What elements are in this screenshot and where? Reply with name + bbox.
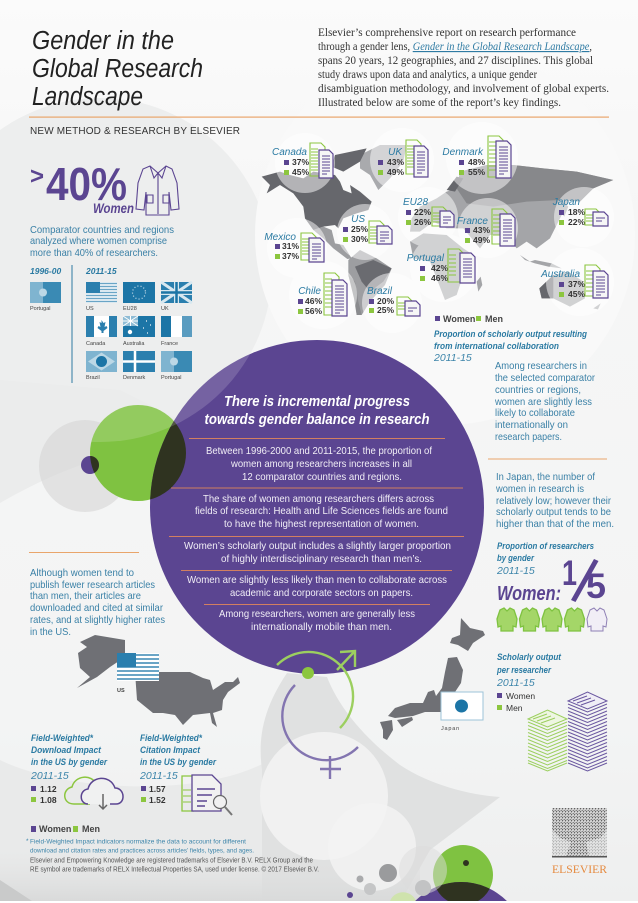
- flag: Portugal 1996: [30, 282, 61, 312]
- footnote: *: [26, 838, 29, 845]
- Elsevier logo: [552, 808, 607, 876]
- right text: Japan: relatively low; however their: [496, 495, 611, 507]
- finding 2: [195, 493, 448, 530]
- download impact block: [30, 733, 108, 805]
- finding 5: [219, 608, 415, 633]
- country: Denmark: Denmark: [442, 147, 484, 158]
- icon: cloud download: [65, 777, 123, 809]
- country: Brazil: 20%: [377, 296, 394, 306]
- finding 1: 12 comparator countries and regions.: [242, 471, 402, 483]
- country: Australia: Australia: [540, 269, 580, 280]
- right text: Japan: [495, 471, 614, 530]
- flag: UK: UK: [161, 306, 169, 312]
- right text: collaboration: internationally on: [495, 419, 568, 431]
- comparator text: more than 40% of researchers.: [30, 247, 158, 259]
- country: Chile: [298, 273, 347, 316]
- intro paragraph: Illustrated below are some of the report’s key findings.: [318, 97, 561, 109]
- country: Portugal: [407, 249, 475, 283]
- title: Global Research: [32, 55, 203, 83]
- flag: Portugal: Portugal: [161, 375, 182, 381]
- intro paragraph: spans 20 years, 12 geographies, and 27 disciplines. This global: [318, 55, 593, 67]
- trademark text: RE symbol are trademarks of RELX Intellectual Properties SA, used under license. © 2017 Elsevier B.V.: [30, 866, 319, 874]
- country: Australia: 37%: [568, 279, 585, 289]
- country: Canada: 45%: [292, 167, 309, 177]
- icon: lab coat: [136, 166, 179, 215]
- country: Canada: 37%: [292, 157, 309, 167]
- right text: Japan: women in research is: [495, 483, 584, 495]
- trademark text: [30, 858, 319, 874]
- country: Denmark: 55%: [468, 167, 485, 177]
- flag period headings: 1996-00: [30, 266, 61, 276]
- country: UK: 43%: [387, 157, 404, 167]
- country: UK: UK: [388, 147, 403, 158]
- proportion heading: by gender: [497, 553, 535, 564]
- flag: EU28: EU28: [123, 306, 137, 312]
- country: Chile: 46%: [305, 296, 322, 306]
- country: UK: 49%: [387, 167, 404, 177]
- country: Canada: [272, 143, 333, 178]
- scholarly output heading: [496, 652, 562, 689]
- finding 5: Among researchers, women are generally less: [219, 608, 415, 620]
- finding 3: [184, 540, 451, 565]
- US map: [77, 635, 240, 727]
- footnote: Field-Weighted Impact indicators normalize the data to account for different: [30, 838, 246, 846]
- country: Brazil: 25%: [377, 305, 394, 315]
- flag: Denmark: Denmark: [123, 375, 146, 381]
- Elsevier logo: ELSEVIER: [552, 864, 607, 876]
- right text: collaboration: women are slightly less: [494, 396, 592, 408]
- citation impact block: 2011-15: [139, 770, 178, 782]
- flag: Canada: Canada: [86, 341, 106, 347]
- country: Japan: Japan: [552, 197, 580, 208]
- country: EU28: 26%: [414, 217, 431, 227]
- right text: Japan: In Japan, the number of: [496, 471, 595, 483]
- download impact block: in the US by gender: [31, 757, 108, 768]
- country: US: US: [351, 214, 365, 225]
- bottom legend: Men: [82, 824, 100, 834]
- finding 3: of highly interdisciplinary research than men’s.: [221, 553, 422, 565]
- flag: Japan: Japan: [441, 726, 460, 732]
- flag: Brazil: Brazil: [86, 375, 100, 381]
- country: EU28: 22%: [414, 207, 431, 217]
- flag: Denmark: [123, 351, 155, 381]
- stat: more than 40% women: >: [30, 163, 44, 190]
- country: Japan: [552, 197, 608, 227]
- world map: [262, 145, 613, 315]
- left text: downloads: rates, and at slightly higher rates: [30, 614, 165, 626]
- map heading: Proportion of scholarly output resulting: [434, 329, 587, 340]
- stat: more than 40% women: 40%: [46, 158, 127, 210]
- map legend: Men: [485, 314, 503, 324]
- country: Japan: 22%: [568, 217, 585, 227]
- country: Chile: 56%: [305, 306, 322, 316]
- comparator text: [30, 224, 174, 259]
- map legend: Women: [443, 314, 475, 324]
- citation impact block: 1.52: [149, 795, 166, 805]
- flag: France: [161, 316, 192, 347]
- country: EU28: [403, 197, 454, 227]
- finding 4: Women are slightly less likely than men to collaborate across: [187, 574, 447, 586]
- flag: France: France: [161, 341, 178, 347]
- map heading: from international collaboration: [434, 341, 559, 352]
- citation impact block: [139, 733, 217, 805]
- right text: collaboration: likely to collaborate: [495, 407, 575, 419]
- flag period headings: 2011-15: [85, 266, 117, 276]
- map legend: [435, 314, 503, 324]
- finding 4: [187, 574, 447, 599]
- purple circle heading: There is incremental progress: [224, 393, 410, 410]
- right text: collaboration: the selected comparator: [495, 372, 595, 384]
- purple circle heading: towards gender balance in research: [204, 411, 430, 428]
- country: Portugal: 42%: [431, 263, 448, 273]
- left text: downloads: in the US.: [30, 626, 71, 638]
- citation impact block: 1.57: [149, 784, 166, 794]
- stack: women: [568, 692, 607, 771]
- flag: Brazil: [86, 351, 117, 381]
- country: Mexico: Mexico: [264, 232, 296, 243]
- output legend: Men: [506, 703, 523, 713]
- bottom legend: Women: [39, 824, 71, 834]
- country: France: 49%: [473, 235, 490, 245]
- flag: Canada: [86, 316, 117, 347]
- proportion heading: [496, 541, 594, 577]
- country: Brazil: [367, 286, 420, 316]
- download impact block: Field-Weighted*: [31, 733, 94, 744]
- proportion heading: Proportion of researchers: [497, 541, 594, 552]
- country: Mexico: 37%: [282, 251, 299, 261]
- comparator text: Comparator countries and regions: [30, 224, 174, 236]
- country: Chile: Chile: [298, 286, 321, 297]
- download impact block: Download Impact: [31, 745, 102, 756]
- download impact block: 2011-15: [30, 770, 69, 782]
- country: France: [457, 209, 515, 246]
- country: US: 30%: [351, 234, 368, 244]
- country: Australia: 45%: [568, 289, 585, 299]
- flag: Portugal: [161, 351, 192, 381]
- finding 2: The share of women among researchers differs across: [203, 493, 434, 505]
- flag: Japan: [441, 692, 483, 732]
- country: Mexico: [264, 232, 324, 262]
- map heading: 2011-15: [433, 352, 472, 364]
- flag: EU28: [123, 282, 155, 312]
- Japan map: [380, 618, 485, 740]
- footnote: download and citation rates and practices across articles’ fields, types, and ages.: [30, 848, 254, 854]
- country: Portugal: 46%: [431, 273, 448, 283]
- icon: document with magnifier: [182, 775, 232, 815]
- intro paragraph: disambiguation methodology, and involvement of global experts.: [318, 83, 609, 95]
- stack: men: [528, 710, 567, 771]
- intro paragraph: through a gender lens, Gender in the Global Research Landscape,: [318, 41, 592, 53]
- trademark text: Elsevier and Empowering Knowledge are registered trademarks of Elsevier B.V. RELX Group and the: [30, 858, 313, 864]
- country: France: 43%: [473, 225, 490, 235]
- right text: Japan: higher than that of the men.: [496, 518, 614, 530]
- flag: UK: [161, 282, 192, 312]
- country: France: France: [457, 216, 488, 227]
- scholarly output heading: 2011-15: [496, 677, 535, 689]
- left text: downloads: Although women tend to: [30, 567, 134, 579]
- finding 1: women among researchers increases in all: [230, 458, 412, 470]
- citation impact block: Citation Impact: [140, 745, 201, 756]
- decorative circle group: [39, 405, 186, 512]
- country: Portugal: Portugal: [407, 253, 445, 264]
- title: Landscape: [32, 83, 143, 111]
- stat: women one in five: 1: [562, 554, 577, 593]
- right text: Japan: scholarly output tends to be: [496, 506, 611, 518]
- intro paragraph: [318, 27, 609, 109]
- stat: women one in five: 5: [586, 567, 606, 606]
- citation impact block: Field-Weighted*: [140, 733, 203, 744]
- bottom legend: [31, 824, 100, 834]
- finding 3: Women’s scholarly output includes a slightly larger proportion: [184, 540, 451, 552]
- country: Japan: 18%: [568, 207, 585, 217]
- output legend: [497, 691, 535, 713]
- flag: Portugal 1996: Portugal: [30, 306, 50, 312]
- flag: US large: [117, 653, 159, 694]
- finding 4: academic and corporate sectors on papers.: [230, 587, 413, 599]
- left text: downloads: publish fewer research articles: [30, 579, 155, 591]
- finding 2: to have the highest representation of women.: [224, 518, 419, 530]
- citation impact block: in the US by gender: [140, 757, 217, 768]
- country: Brazil: Brazil: [367, 286, 393, 297]
- title: Gender in the: [32, 27, 174, 55]
- section label: NEW METHOD & RESEARCH BY ELSEVIER: [30, 126, 240, 137]
- country: US: 25%: [351, 224, 368, 234]
- country: Denmark: 48%: [468, 157, 485, 167]
- bottom circles: [347, 845, 507, 901]
- flag period headings: [30, 266, 117, 276]
- footnote: [26, 838, 254, 854]
- output legend: Women: [506, 691, 535, 701]
- stat: women one in five: Women:: [497, 583, 561, 605]
- country: EU28: EU28: [403, 197, 428, 208]
- comparator text: analyzed where women comprise: [30, 235, 167, 247]
- gender symbols: [277, 651, 358, 779]
- country: US: [343, 214, 392, 244]
- right text: collaboration: countries or regions,: [495, 384, 581, 396]
- finding 1: Between 1996-2000 and 2011-2015, the proportion of: [206, 445, 432, 457]
- country: Denmark: [442, 136, 511, 178]
- scholarly output heading: Scholarly output: [497, 652, 562, 663]
- proportion heading: 2011-15: [496, 565, 535, 577]
- finding 1: [206, 445, 432, 483]
- left text: downloads: [29, 552, 165, 638]
- country: Mexico: 31%: [282, 241, 299, 251]
- flag: Australia: [123, 316, 155, 347]
- flag: Australia: Australia: [123, 341, 145, 347]
- download impact block: 1.08: [40, 795, 57, 805]
- right text: collaboration: [494, 360, 595, 443]
- left text: downloads: downloaded and cited at similar: [30, 602, 163, 614]
- country highlight circles: [267, 122, 614, 333]
- country: UK: [378, 140, 428, 177]
- icon row: lab coats: [497, 608, 607, 631]
- finding 2: fields of research: Health and Life Sciences fields are found: [195, 505, 448, 517]
- purple circle heading: [204, 393, 430, 428]
- right text: collaboration: research papers.: [495, 431, 562, 443]
- finding 5: internationally mobile than men.: [251, 621, 392, 633]
- stat: women one in five: [497, 554, 606, 606]
- main purple circle: [92, 340, 484, 674]
- country: Australia: [540, 265, 608, 299]
- flag: US: US: [86, 306, 94, 312]
- intro paragraph: Elsevier’s comprehensive report on research performance: [318, 27, 576, 39]
- stat: more than 40% women: Women: [93, 200, 134, 216]
- country: Canada: Canada: [272, 147, 307, 158]
- title: [32, 27, 203, 111]
- map heading: [433, 329, 587, 364]
- flag: US large: US: [117, 688, 125, 694]
- download impact block: 1.12: [40, 784, 57, 794]
- left text: downloads: than men, their articles are: [30, 590, 141, 602]
- intro paragraph: study draws upon data and analytics, a unique gender: [318, 69, 537, 81]
- flag: US: [86, 282, 117, 312]
- scholarly output heading: per researcher: [496, 665, 552, 676]
- right text: collaboration: Among researchers in: [495, 360, 587, 372]
